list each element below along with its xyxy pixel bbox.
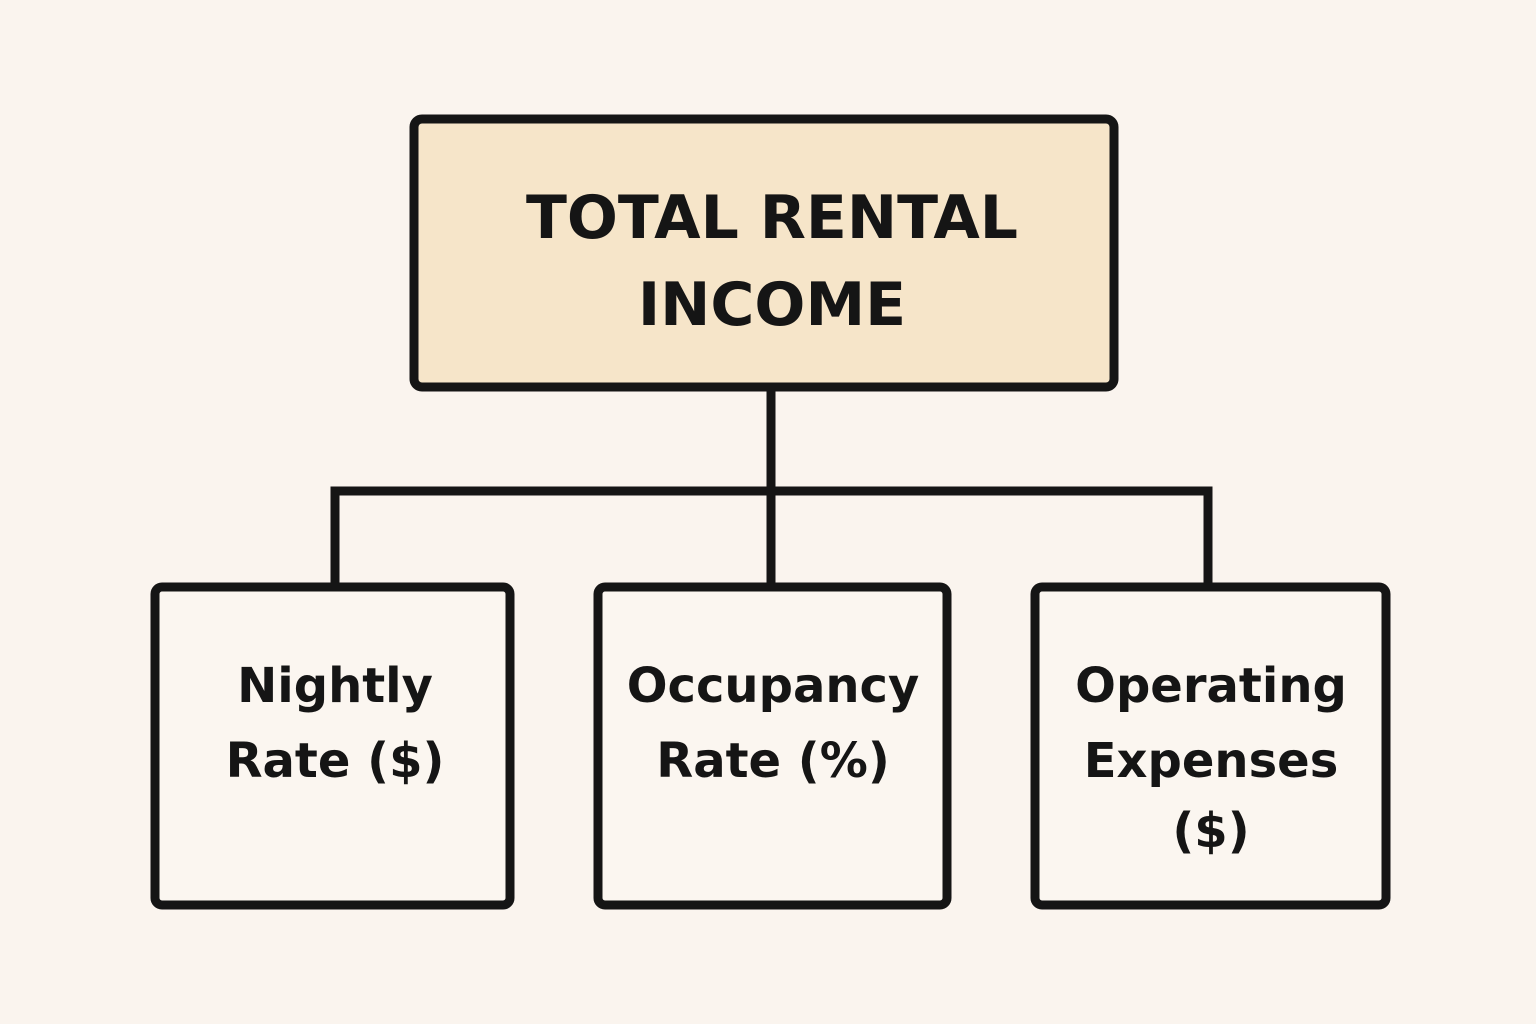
box: operating expenses [1035,587,1386,905]
box: operating expenses: ($) [1172,803,1250,859]
box: operating expenses: Operating [1075,658,1347,714]
box: occupancy rate: Rate (%) [656,733,890,789]
box: nightly rate: Rate ($) [226,733,444,789]
top box: total rental income [414,119,1114,387]
box: occupancy rate: Occupancy [627,658,919,714]
top box: total rental income: TOTAL RENTAL [526,183,1018,253]
connector lines [335,390,1208,583]
box: nightly rate: Nightly [237,658,433,714]
top box: total rental income: INCOME [638,270,906,340]
box: occupancy rate [598,587,947,905]
box: operating expenses: Expenses [1084,733,1338,789]
box: nightly rate [155,587,510,905]
